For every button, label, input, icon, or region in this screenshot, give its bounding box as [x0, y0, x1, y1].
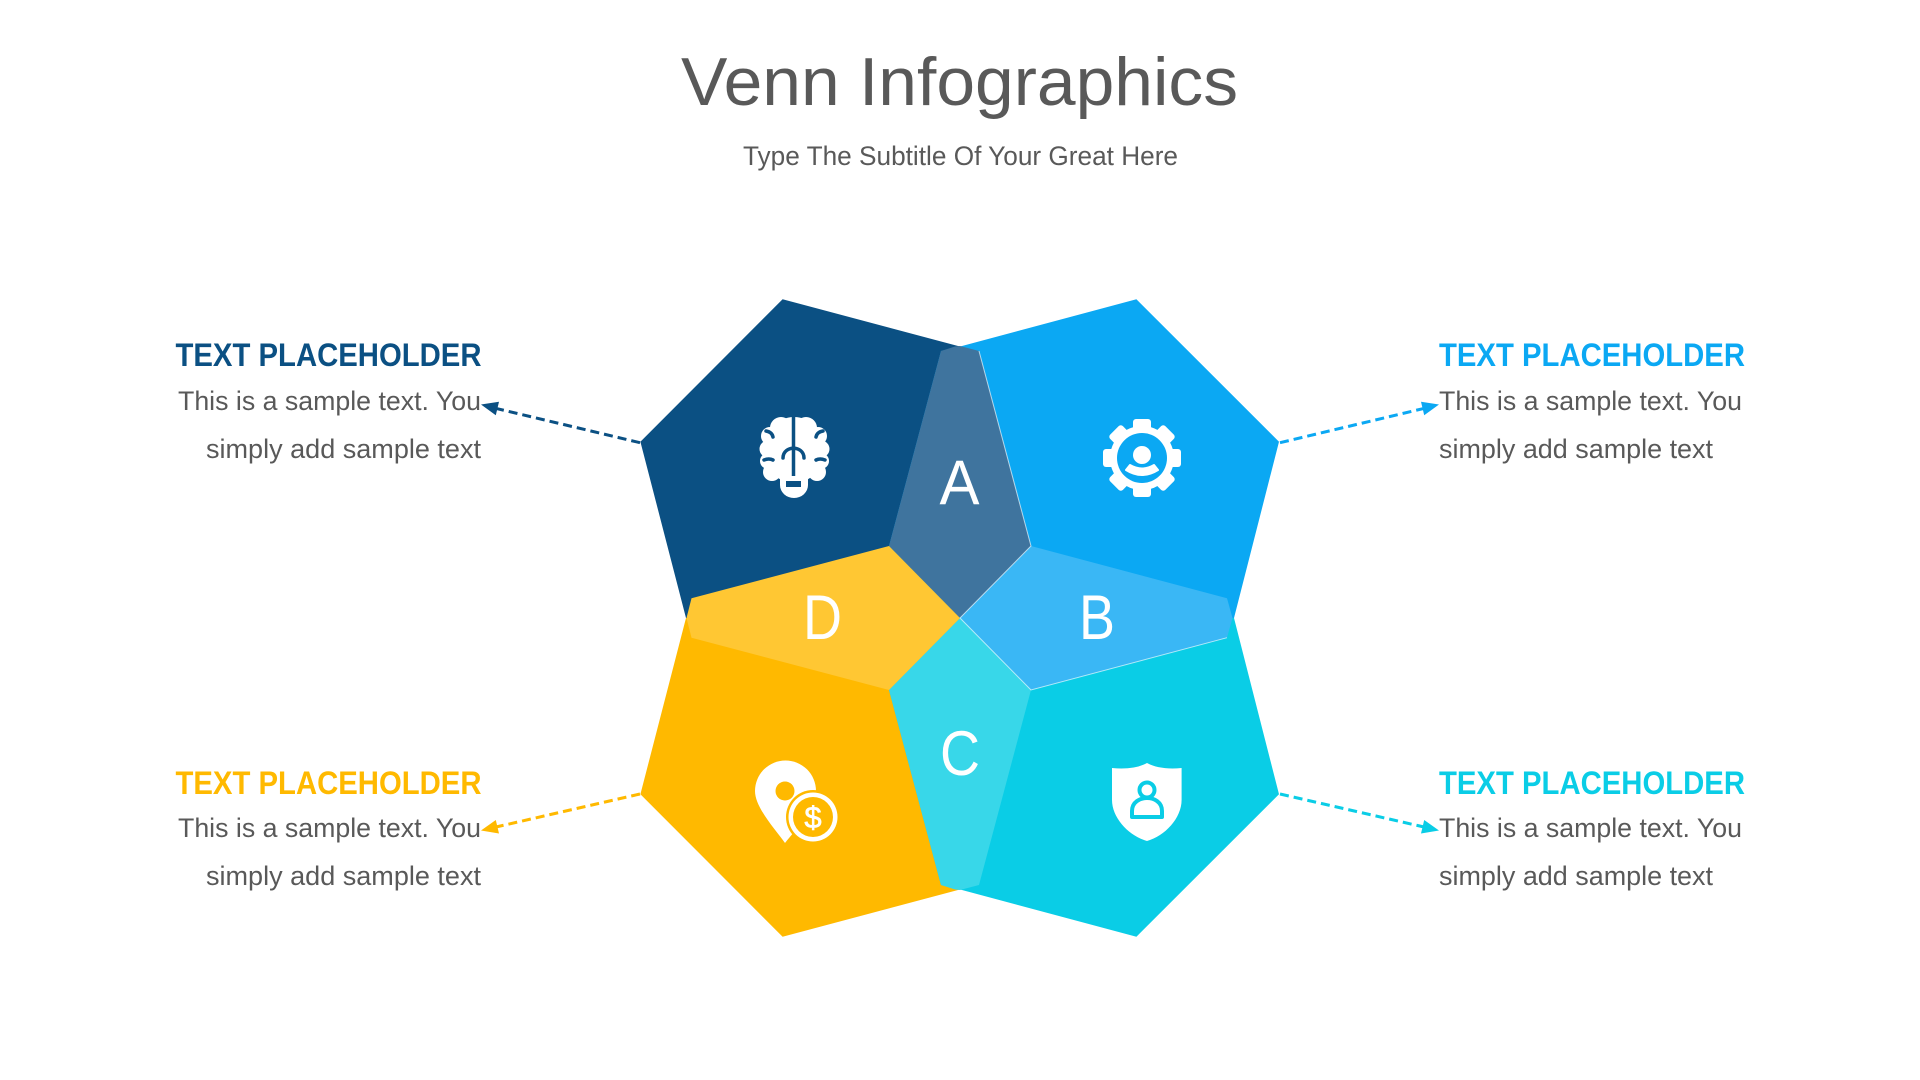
- text block: bottom left: This is a sample text. You: [178, 813, 481, 843]
- overlap A: [889, 346, 1031, 618]
- text block: bottom left: simply add sample text: [206, 861, 481, 891]
- arrow: top right: [1280, 402, 1439, 443]
- letter C: C: [940, 719, 980, 789]
- text block: top right: simply add sample text: [1439, 434, 1713, 464]
- title: Venn Infographics: [681, 44, 1238, 120]
- overlap C: [889, 618, 1031, 890]
- icon: pin with dollar coin: $: [804, 800, 822, 835]
- text block: top right: TEXT PLACEHOLDER: [1439, 337, 1745, 373]
- text block: bottom right: simply add sample text: [1439, 861, 1713, 891]
- text block: bottom right: This is a sample text. You: [1439, 813, 1742, 843]
- letter B: B: [1079, 583, 1115, 653]
- letter D: D: [803, 583, 842, 653]
- pentagon: teal: [889, 618, 1279, 937]
- letter A: A: [940, 448, 980, 518]
- pentagon: gold: [640, 618, 1031, 937]
- arrow: bottom right: [1280, 794, 1439, 834]
- text block: top left: This is a sample text. You: [178, 386, 481, 416]
- overlap D: [686, 546, 960, 690]
- subtitle: Type The Subtitle Of Your Great Here: [743, 141, 1178, 171]
- text block: bottom right: TEXT PLACEHOLDER: [1439, 765, 1745, 801]
- icon: brain bulb: [760, 415, 830, 498]
- arrow: top left: [481, 402, 640, 443]
- overlap B: [960, 546, 1232, 690]
- text block: bottom left: [176, 765, 482, 891]
- icon: gear with person: [1103, 419, 1181, 497]
- icon: shield with person: [1112, 763, 1182, 841]
- text block: top right: [1439, 337, 1745, 464]
- text block: top left: simply add sample text: [206, 434, 481, 464]
- text block: top left: TEXT PLACEHOLDER: [176, 337, 482, 373]
- text block: bottom right: [1439, 765, 1745, 891]
- text block: top left: [176, 337, 482, 464]
- panel: venn diagram: [640, 299, 1279, 937]
- overlap hairlines: [960, 351, 1227, 690]
- text block: top right: This is a sample text. You: [1439, 386, 1742, 416]
- pentagon: dark blue: [640, 299, 1031, 618]
- arrow: bottom left: [481, 794, 640, 834]
- text block: bottom left: TEXT PLACEHOLDER: [176, 765, 482, 801]
- pentagon: light blue: [889, 299, 1279, 618]
- icon: pin with dollar coin: [755, 760, 840, 844]
